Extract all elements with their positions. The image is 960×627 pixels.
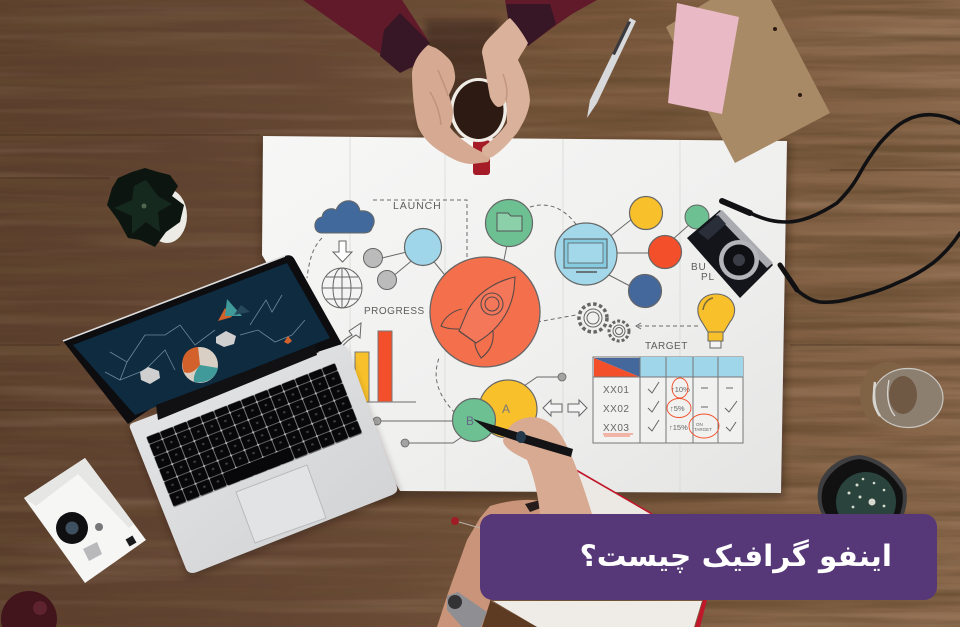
screen hexagon icons xyxy=(140,367,160,384)
green small node xyxy=(685,205,709,229)
target table xyxy=(593,357,743,443)
target table: XX01 xyxy=(603,385,629,396)
light blue node xyxy=(404,228,442,266)
keyboard xyxy=(146,363,363,508)
dark blue node xyxy=(628,274,662,308)
lower hand with wristwatch xyxy=(437,498,548,627)
striped small node one xyxy=(364,248,382,268)
sleeves of the person holding the cup xyxy=(303,0,597,73)
bar chart xyxy=(340,331,416,402)
flow chart drawn on the paper xyxy=(307,196,743,447)
potted succulent xyxy=(107,168,187,247)
target table: TARGET xyxy=(694,427,712,432)
hinge xyxy=(156,345,317,420)
laptop xyxy=(63,255,397,573)
left hand around cup xyxy=(412,45,490,164)
down arrow xyxy=(333,241,352,262)
partially hidden business plan label xyxy=(691,262,715,283)
title banner xyxy=(480,514,937,600)
laptop shadow xyxy=(130,350,400,578)
globe icon xyxy=(322,268,362,308)
partially hidden business plan label: PL xyxy=(701,272,715,283)
white instant camera xyxy=(24,458,146,583)
cloud icon xyxy=(315,201,374,233)
yellow node xyxy=(630,196,662,230)
shadow between hands xyxy=(420,20,505,135)
screen triangle chart xyxy=(218,299,250,321)
kraft paper folder xyxy=(666,0,830,163)
laptop lid xyxy=(63,255,342,424)
orange rocket circle xyxy=(430,257,540,367)
target table: ↑5% xyxy=(670,404,685,413)
trackpad xyxy=(236,465,326,543)
green venn circle B: B xyxy=(466,414,474,428)
title text: اینفو گرافیک چیست؟ xyxy=(580,539,892,573)
hand holding marker xyxy=(473,417,592,514)
lid edge highlight xyxy=(63,256,285,341)
pen on the table xyxy=(587,18,636,118)
target table: ON xyxy=(696,422,703,427)
yellow venn circle A: A xyxy=(502,402,510,416)
cactus in dark pot xyxy=(818,455,907,532)
right hand around cup xyxy=(482,18,530,157)
target table: XX03 xyxy=(603,423,629,434)
striped small node two xyxy=(378,270,396,290)
green folder node xyxy=(486,200,532,246)
black photo camera xyxy=(687,210,773,298)
progress label: PROGRESS xyxy=(364,306,425,317)
target table: XX02 xyxy=(603,404,629,415)
black camera strap xyxy=(722,115,960,302)
line end dots xyxy=(373,373,566,447)
laptop screen xyxy=(73,263,330,415)
screen hexagon network xyxy=(105,295,305,380)
yellow venn circle A xyxy=(479,380,537,438)
red node xyxy=(648,236,682,268)
apple xyxy=(1,591,57,627)
gears icon xyxy=(579,304,629,341)
monitor node xyxy=(555,223,617,285)
glass of water on coaster xyxy=(860,362,943,428)
partially hidden business plan label: BU xyxy=(691,262,706,273)
launch label: LAUNCH xyxy=(393,200,442,212)
light bulb icon xyxy=(698,294,735,348)
double arrows xyxy=(543,400,587,416)
target label: TARGET xyxy=(645,341,688,352)
target table: ↑10% xyxy=(671,385,690,394)
laptop base xyxy=(130,345,397,573)
paper shadow xyxy=(262,140,790,498)
map pin on table xyxy=(451,517,480,528)
open notebook beneath the lower hands xyxy=(470,470,707,627)
screen pie chart xyxy=(182,347,218,383)
large paper sheet xyxy=(262,136,787,493)
target table: ↑15% xyxy=(669,423,688,432)
progress arrow xyxy=(338,323,361,349)
green venn circle B xyxy=(452,398,496,442)
dashed arrow head toward gears xyxy=(636,323,641,329)
coffee cup xyxy=(450,78,507,175)
connector lines xyxy=(307,200,698,443)
pink note card xyxy=(668,3,739,114)
